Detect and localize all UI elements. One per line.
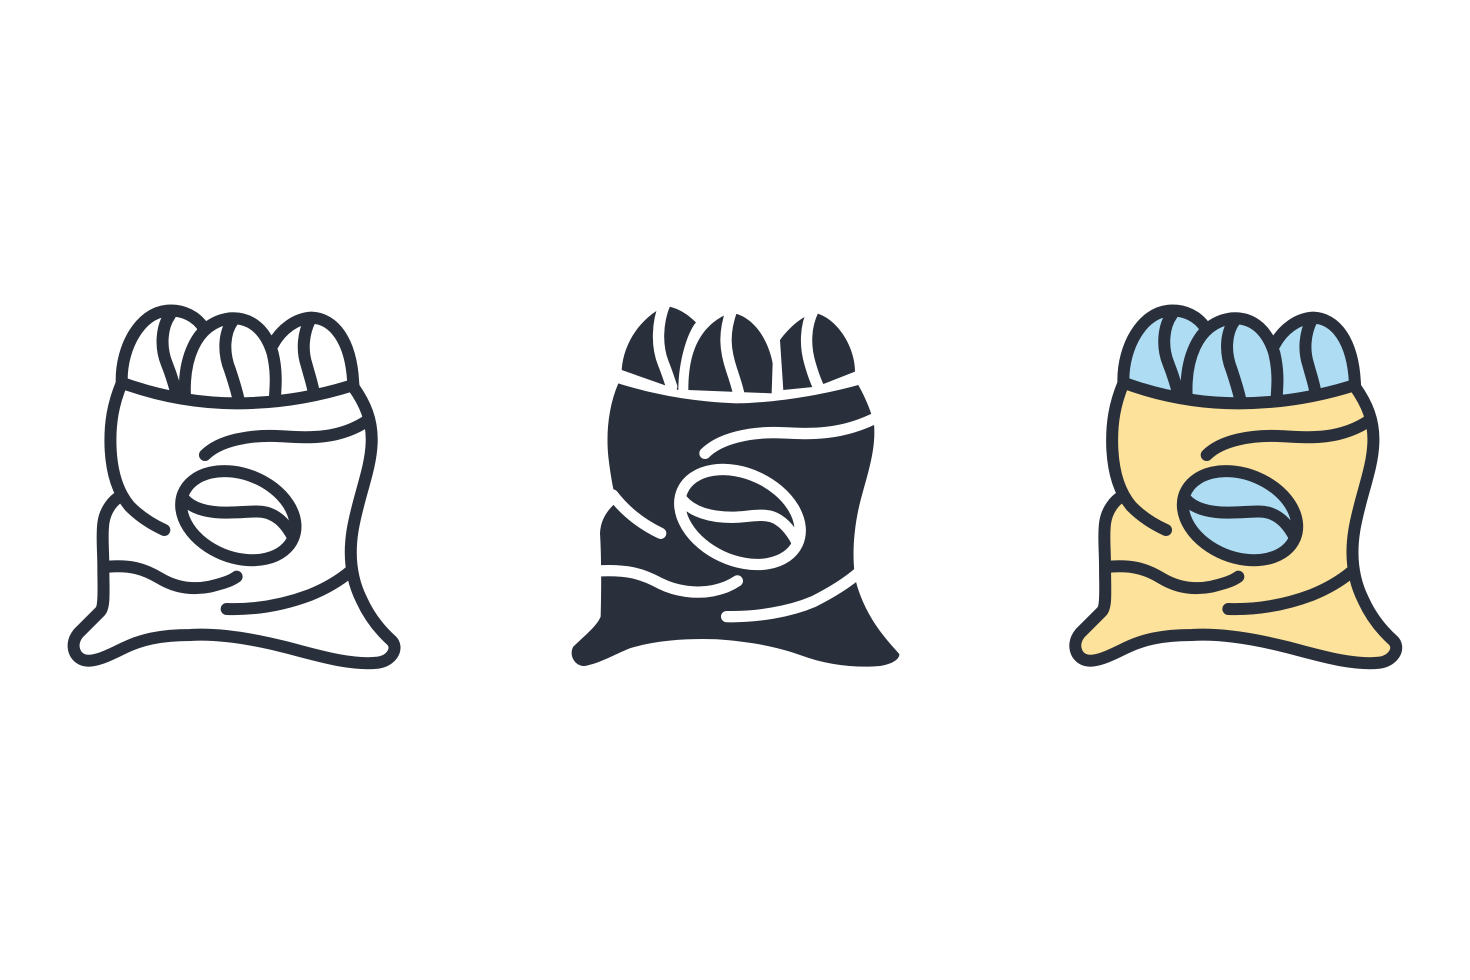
icon: outline coffee sack: [74, 311, 395, 663]
white detail lines: [597, 303, 878, 617]
outlines: [1075, 311, 1396, 663]
icon: coloured coffee sack: [1075, 311, 1396, 663]
sack body silhouette: [572, 383, 899, 667]
icon: solid glyph coffee sack: [572, 303, 899, 667]
beans fill: [1123, 311, 1355, 403]
left bean: [622, 306, 696, 390]
right bean: [780, 313, 855, 390]
sack fill: [1075, 383, 1396, 663]
middle bean: [688, 313, 773, 393]
centre bean fill: [1169, 455, 1311, 576]
